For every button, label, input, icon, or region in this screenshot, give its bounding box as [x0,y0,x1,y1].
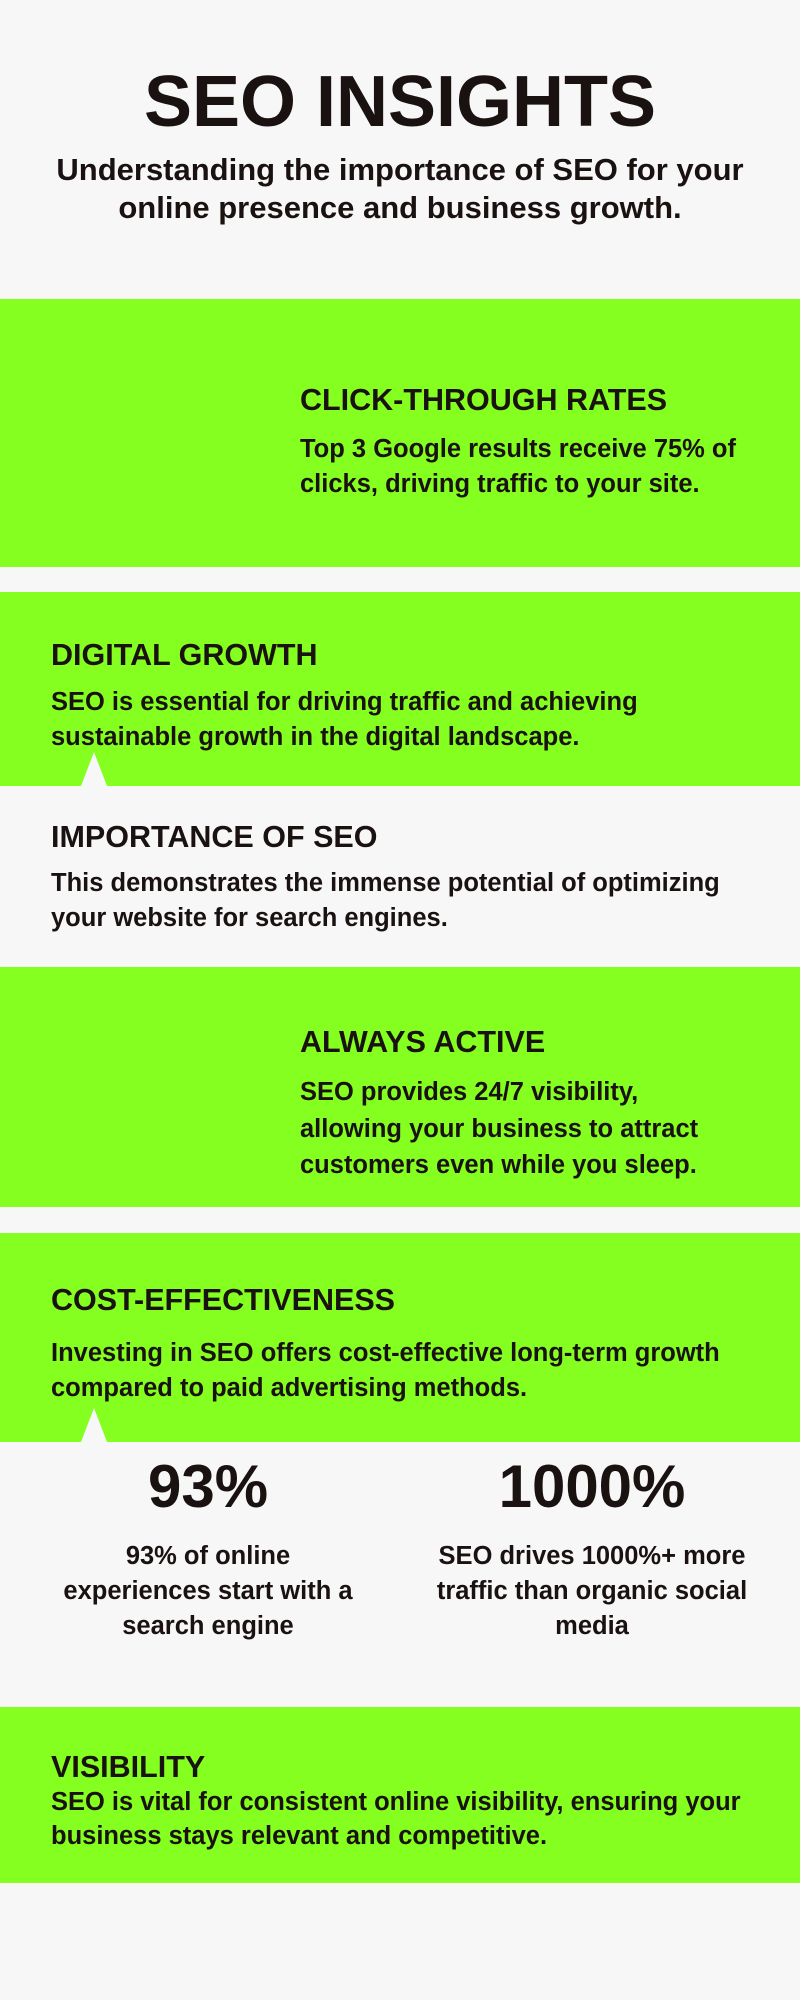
heading: digital growth: DIGITAL GROWTH [51,638,318,672]
text: digital growth body: SEO is essential for driving traffic and achieving sustainable growth in the digital landscape. [51,688,638,751]
subtitle: Understanding the importance of SEO for your [56,152,744,187]
text: visibility body: SEO is vital for consistent online visibility, ensuring your business stays relevant and competitive. [51,1788,741,1850]
heading: always active: ALWAYS ACTIVE [300,1025,545,1059]
heading: click-through rates: CLICK-THROUGH RATES [300,383,667,417]
subtitle [56,152,744,225]
panel: always active [0,967,800,1207]
stat: 93%: 93% of online experiences start with a search engine [63,1542,353,1640]
pointer triangle [81,1408,107,1442]
heading: cost-effectiveness: COST-EFFECTIVENESS [51,1283,395,1317]
subtitle: online presence and business growth. [118,190,682,225]
stat: 1000%: 1000% [499,1453,685,1520]
panel: visibility [0,1707,800,1883]
text: cost body: Investing in SEO offers cost-effective long-term growth compared to paid advertising methods. [51,1339,720,1402]
text: importance body: This demonstrates the immense potential of optimizing your website for search engines. [51,869,720,932]
panel: click-through rates [0,299,800,567]
title: SEO INSIGHTS [144,62,656,142]
panel: cost-effectiveness [0,1233,800,1442]
stat: 93% [63,1453,353,1640]
text: click-through body: Top 3 Google results receive 75% of clicks, driving traffic to your site. [300,435,736,498]
stat: 1000% [437,1453,747,1640]
stat: 93%: 93% [148,1453,268,1520]
stat: 1000%: SEO drives 1000%+ more traffic than organic social media [437,1542,747,1640]
heading: importance of seo: IMPORTANCE OF SEO [51,820,377,854]
heading: visibility: VISIBILITY [51,1750,205,1784]
pointer triangle [81,752,107,786]
text: always active body: SEO provides 24/7 visibility, allowing your business to attract customers even while you sleep. [300,1078,698,1179]
panel: digital growth [0,592,800,786]
